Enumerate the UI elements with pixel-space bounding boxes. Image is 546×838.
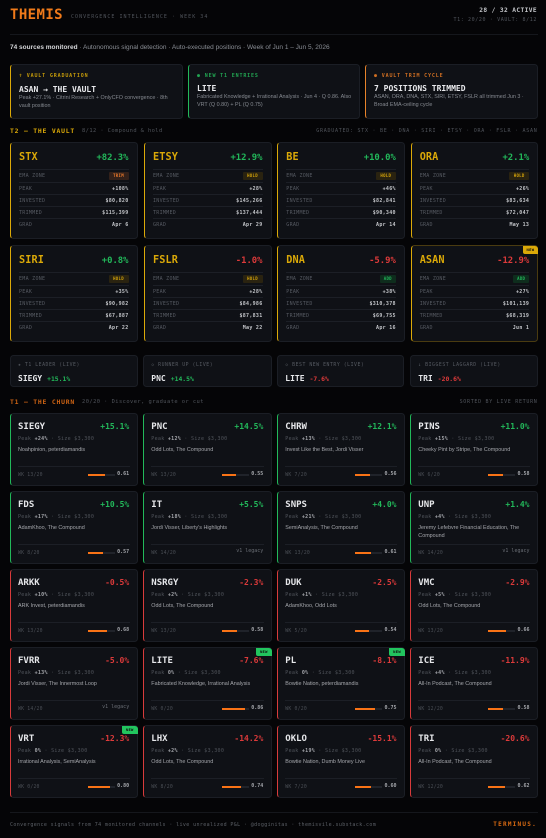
churn card: VRT: Peak 0% · Size $3,300 (18, 748, 88, 754)
churn card: SNPS: 0.61 (384, 549, 396, 555)
section heading: T1 the churn: T1 — THE CHURN (10, 398, 75, 406)
churn card: VMC: Odd Lots, The Compound (418, 603, 480, 609)
churn card: NSRGY (143, 569, 272, 642)
churn card: PNC: PNC (151, 422, 168, 432)
vault card: ASAN: EMA ZONE (420, 276, 446, 282)
churn card: VRT: -12.3% (100, 734, 129, 743)
vault card: STX: Apr 6 (112, 222, 128, 228)
vault card: ETSY: ETSY (153, 152, 178, 163)
churn card: UNP: WK 14/20 (418, 551, 443, 556)
churn card: LHX: Odd Lots, The Compound (151, 759, 213, 765)
vault card: ORA: EMA ZONE (420, 173, 446, 179)
vault card: ASAN (411, 245, 538, 342)
section subheading: churn: 20/20 · Discover, graduate or cut (82, 399, 204, 405)
churn card: ARKK: -0.5% (105, 578, 129, 587)
vault card: DNA: Apr 16 (376, 325, 396, 331)
churn card: TRI: 0.62 (517, 783, 530, 789)
vault card: ASAN: $68,319 (506, 313, 529, 319)
churn card: IT: Peak +18% · Size $3,300 (151, 514, 227, 520)
vault card: ETSY: TRIMMED (153, 210, 176, 216)
churn card: PNC: +14.5% (234, 422, 263, 431)
vault card: ORA: +2.1% (502, 153, 529, 163)
vault card: BE: HOLD (380, 173, 391, 178)
churn card: CHRW: 0.56 (384, 471, 396, 477)
vault card: FSLR: HOLD (247, 276, 258, 281)
churn card: LITE: Fabricated Knowledge, Irrational Analysis (151, 681, 250, 687)
churn card: NSRGY: WK 13/20 (151, 629, 176, 634)
alert: vault graduation: ✝ VAULT GRADUATION (19, 72, 88, 78)
churn card: LHX: LHX (151, 734, 168, 744)
stat: biggest laggard: ↓ BIGGEST LAGGARD (LIVE) (418, 363, 501, 368)
churn card: NSRGY: -2.3% (239, 578, 263, 587)
vault card: FSLR: EMA ZONE (153, 276, 179, 282)
churn card: VRT (10, 725, 138, 798)
vault card: BE: EMA ZONE (286, 173, 313, 179)
vault card: ETSY: PEAK (153, 186, 166, 192)
churn card: LHX: WK 8/20 (151, 785, 173, 790)
churn card: PL (277, 647, 405, 720)
vault card: SIRI: PEAK (19, 289, 32, 295)
vault card: FSLR: +28% (249, 289, 262, 295)
churn card: ARKK: ARK Invest, peterdiamandis (18, 603, 85, 609)
churn card: PINS: +11.0% (501, 422, 530, 431)
churn card: FDS: 0.57 (117, 549, 129, 555)
churn card: ARKK: 0.68 (117, 627, 129, 633)
vault card: ORA: ORA (420, 152, 438, 163)
vault card: ORA: PEAK (420, 186, 433, 192)
churn card: SNPS: SNPS (285, 500, 307, 510)
churn card: LHX: Peak +2% · Size $3,300 (151, 748, 224, 754)
vault card: DNA: PEAK (286, 289, 299, 295)
churn card: SIEGY: WK 13/20 (18, 473, 43, 478)
intro text: 74 sources monitored · Autonomous signal detection · Auto-executed positions · Week of Jun 1 – Jun 5, 2026 (10, 44, 330, 51)
vault card: SIRI: SIRI (19, 255, 44, 266)
churn card: DUK: 0.54 (384, 627, 396, 633)
churn card: VMC: Peak +5% · Size $3,300 (418, 592, 491, 598)
churn card: VRT: 0.80 (117, 783, 129, 789)
stat: runner up: ◇ RUNNER UP (LIVE) (151, 363, 213, 368)
stat: best new entry: LITE -7.6% (285, 374, 329, 383)
churn card: ICE (410, 647, 538, 720)
vault card: ASAN: INVESTED (420, 301, 446, 307)
alert: vault trim cycle (365, 64, 538, 119)
vault card: DNA: INVESTED (286, 301, 313, 307)
header: tier counts: T1: 20/20 · VAULT: 8/12 (454, 16, 537, 22)
vault card: SIRI: INVESTED (19, 301, 45, 307)
vault card: ASAN: NEW (527, 247, 534, 252)
churn card: ICE: WK 12/20 (418, 707, 443, 712)
section subheading: vault: 8/12 · Compound & hold (82, 128, 163, 134)
churn card: TRI: WK 12/20 (418, 785, 443, 790)
vault card: ASAN: GRAD (420, 325, 433, 331)
churn card: LHX (143, 725, 272, 798)
vault card: ETSY: EMA ZONE (153, 173, 179, 179)
vault card: STX: $80,820 (105, 198, 128, 204)
churn card: VRT: WK 0/20 (18, 785, 40, 790)
vault card: SIRI: $67,887 (105, 313, 128, 319)
churn card: IT (143, 491, 272, 564)
churn card: OKLO (277, 725, 405, 798)
vault card: ORA: HOLD (514, 173, 525, 178)
churn card: FVRR: Jordi Visser, The Innermost Loop (18, 681, 97, 687)
churn card: TRI (410, 725, 538, 798)
churn card: PNC (143, 413, 272, 486)
churn card: SNPS: Peak +21% · Size $3,300 (285, 514, 361, 520)
churn card: FVRR: v1 legacy (102, 704, 129, 710)
vault card: ORA: $72,047 (506, 210, 529, 216)
churn card: DUK: -2.5% (372, 578, 396, 587)
churn card: PNC: Peak +12% · Size $3,300 (151, 436, 227, 442)
vault card: STX: +108% (112, 186, 128, 192)
vault card: FSLR: TRIMMED (153, 313, 176, 319)
churn card: PL: 0.75 (384, 705, 396, 711)
churn card: LITE: Peak 0% · Size $3,300 (151, 670, 221, 676)
churn card: ICE: 0.58 (517, 705, 530, 711)
churn card: PINS: 0.58 (517, 471, 530, 477)
churn card: SNPS: +4.0% (372, 500, 396, 509)
vault card: BE: +46% (383, 186, 396, 192)
churn card: DUK: AdamKhoo, Odd Lots (285, 603, 337, 609)
vault card: FSLR: -1.0% (236, 256, 262, 266)
churn card: UNP: Jeremy Lefebvre Financial Education, The Compound (418, 525, 519, 539)
alert: vault trim cycle: ASAN, ORA, DNA, STX, SIRI, ETSY, FSLR all trimmed Jun 3 · Broad EMA-ceiling cycle (374, 94, 524, 108)
churn card: LHX: -14.2% (234, 734, 263, 743)
churn card: OKLO: OKLO (285, 734, 307, 744)
churn card: OKLO: -15.1% (368, 734, 396, 743)
churn card: CHRW: CHRW (285, 422, 307, 432)
vault card: FSLR: INVESTED (153, 301, 179, 307)
churn card: SIEGY: Noahpinion, peterdiamandis (18, 447, 85, 453)
churn card: CHRW: +12.1% (368, 422, 396, 431)
vault card: ASAN: Jun 1 (513, 325, 529, 331)
stat: biggest laggard: TRI -20.6% (418, 374, 461, 383)
churn card: IT: Jordi Visser, Liberty's Highlights (151, 525, 227, 531)
churn card: VMC: WK 13/20 (418, 629, 443, 634)
churn card: LITE: -7.6% (239, 656, 263, 665)
churn card: PINS (410, 413, 538, 486)
churn card: UNP: Peak +4% · Size $3,300 (418, 514, 491, 520)
sort note: SORTED BY LIVE RETURN (460, 399, 538, 405)
stat: runner up: PNC +14.5% (151, 374, 194, 383)
vault card: SIRI: $90,982 (105, 301, 128, 307)
section heading: T2 the vault: T2 — THE VAULT (10, 127, 75, 135)
churn card: FVRR: -5.0% (105, 656, 129, 665)
churn card: LITE (143, 647, 272, 720)
churn card: NSRGY: Odd Lots, The Compound (151, 603, 213, 609)
vault card: FSLR (144, 245, 272, 342)
vault card: ASAN: TRIMMED (420, 313, 443, 319)
vault card: SIRI: HOLD (113, 276, 124, 281)
vault card: ASAN: +27% (516, 289, 529, 295)
churn card: PL: Peak 0% · Size $3,300 (285, 670, 355, 676)
churn card: LHX: 0.74 (251, 783, 263, 789)
churn card: VRT: VRT (18, 734, 34, 744)
vault card: ASAN: PEAK (420, 289, 433, 295)
vault card: STX: STX (19, 152, 38, 163)
churn card: DUK: DUK (285, 578, 302, 588)
alert: vault graduation (10, 64, 183, 119)
vault card: ETSY: +28% (249, 186, 262, 192)
churn card: CHRW (277, 413, 405, 486)
vault card: FSLR: PEAK (153, 289, 166, 295)
graduated list: GRADUATED: STX · BE · DNA · SIRI · ETSY · ORA · FSLR · ASAN (316, 128, 538, 134)
churn card: LITE: LITE (151, 656, 173, 666)
alert: new T1 entries: Fabricated Knowledge + Irrational Analysis · Jun 4 · Q 0.86. Also VRT (Q 0.80) + PL (Q 0.75) (197, 94, 351, 108)
churn card: PL: -8.1% (372, 656, 396, 665)
alert: new T1 entries: LITE (197, 84, 216, 92)
stat: runner up (143, 355, 272, 387)
churn card: VMC: VMC (418, 578, 435, 588)
churn card: SIEGY: +15.1% (100, 422, 129, 431)
stat: T1 leader (10, 355, 138, 387)
churn card: FVRR (10, 647, 138, 720)
churn card: IT: IT (151, 500, 162, 510)
churn card: FDS (10, 491, 138, 564)
vault card: SIRI: EMA ZONE (19, 276, 45, 282)
vault card: BE (277, 142, 405, 238)
churn card: SIEGY: 0.61 (117, 471, 129, 477)
vault card: BE: Apr 14 (376, 222, 396, 228)
vault card: STX: TRIM (113, 173, 124, 178)
churn card: VMC: 0.66 (517, 627, 530, 633)
churn card: PNC: Odd Lots, The Compound (151, 447, 213, 453)
vault card: DNA: DNA (286, 255, 305, 266)
churn card: ICE: All-In Podcast, The Compound (418, 681, 492, 687)
stat: best new entry (277, 355, 404, 387)
churn card: ARKK: Peak +10% · Size $3,300 (18, 592, 94, 598)
churn card: IT: v1 legacy (236, 548, 263, 554)
churn card: UNP (410, 491, 538, 564)
vault card: STX: GRAD (19, 222, 32, 228)
alert: new T1 entries: ● NEW T1 ENTRIES (197, 72, 259, 78)
churn card: PNC: 0.55 (251, 471, 263, 477)
churn card: DUK: Peak +1% · Size $3,300 (285, 592, 358, 598)
vault card: STX: TRIMMED (19, 210, 42, 216)
vault card: SIRI: GRAD (19, 325, 32, 331)
churn card: VRT: Irrational Analysis, SemiAnalysis (18, 759, 96, 765)
vault card: DNA: EMA ZONE (286, 276, 313, 282)
vault card: BE: +10.0% (364, 153, 396, 163)
vault card: FSLR: FSLR (153, 255, 178, 266)
churn card: SIEGY: SIEGY (18, 422, 45, 432)
vault card: FSLR: $84,986 (239, 301, 262, 307)
churn card: TRI: -20.6% (501, 734, 530, 743)
churn card: OKLO: Peak +19% · Size $3,300 (285, 748, 361, 754)
churn card: SNPS: SemiAnalysis, The Compound (285, 525, 358, 531)
vault card: ETSY: +12.9% (230, 153, 262, 163)
vault card: DNA: TRIMMED (286, 313, 309, 319)
vault card: ORA: +26% (516, 186, 529, 192)
churn card: PINS: WK 6/20 (418, 473, 440, 478)
churn card: PINS: Peak +15% · Size $3,300 (418, 436, 494, 442)
churn card: UNP: v1 legacy (502, 548, 530, 554)
vault card: DNA: -5.9% (369, 256, 396, 266)
vault card: BE: TRIMMED (286, 210, 309, 216)
vault card: DNA: +38% (383, 289, 396, 295)
churn card: FDS: Peak +17% · Size $3,300 (18, 514, 94, 520)
stat: T1 leader: ★ T1 LEADER (LIVE) (18, 363, 80, 368)
footer note: Convergence signals from 74 monitored channels · live unrealized P&L · @dogginitas · themisvile.substack.com (10, 822, 376, 828)
vault card: BE: $82,841 (373, 198, 396, 204)
churn card: ARKK (10, 569, 138, 642)
vault card: ORA: TRIMMED (420, 210, 443, 216)
churn card: NSRGY: 0.58 (251, 627, 263, 633)
vault card: DNA: ADD (384, 276, 392, 281)
vault card: DNA: $69,755 (373, 313, 396, 319)
churn card: CHRW: Peak +13% · Size $3,300 (285, 436, 361, 442)
churn card: DUK: WK 5/20 (285, 629, 307, 634)
churn card: PL: PL (285, 656, 296, 666)
churn card: LITE: 0.86 (251, 705, 263, 711)
vault card: ORA: $83,634 (506, 198, 529, 204)
churn card: ICE: -11.9% (501, 656, 530, 665)
vault card: STX: +82.3% (96, 153, 128, 163)
churn card: FVRR: WK 14/20 (18, 707, 43, 712)
vault card: FSLR: May 22 (243, 325, 262, 331)
alert: vault graduation: Peak +27.1% · Citrini Research + OnlyCFO convergence · 8th vault position (19, 94, 168, 109)
churn card: PL: WK 0/20 (285, 707, 307, 712)
alert: vault trim cycle: 7 POSITIONS TRIMMED (374, 84, 466, 92)
vault card: ETSY: GRAD (153, 222, 166, 228)
churn card: PINS: PINS (418, 422, 440, 432)
header: logo: THEMIS (10, 7, 63, 23)
churn card: PL: NEW (393, 649, 401, 654)
vault card: ETSY: $145,266 (236, 198, 262, 204)
vault card: ORA: INVESTED (420, 198, 446, 204)
churn card: FDS: AdamKhoo, The Compound (18, 525, 85, 531)
vault card: STX: EMA ZONE (19, 173, 45, 179)
churn card: FDS: FDS (18, 500, 34, 510)
header: active count: 28 / 32 ACTIVE (479, 7, 537, 14)
churn card: FDS: +10.5% (100, 500, 129, 509)
vault card: ORA: May 13 (509, 222, 529, 228)
stat: T1 leader: SIEGY +15.1% (18, 374, 70, 383)
vault card: STX: $115,399 (102, 210, 128, 216)
churn card: LITE: WK 0/20 (151, 707, 173, 712)
vault card: BE: BE (286, 152, 299, 163)
churn card: IT: +5.5% (239, 500, 263, 509)
alert: new T1 entries (188, 64, 360, 119)
churn card: VRT: NEW (126, 727, 134, 732)
vault card: ASAN: ASAN (420, 255, 445, 266)
stat: biggest laggard (410, 355, 538, 387)
vault card: ASAN: $101,139 (503, 301, 529, 307)
vault card: BE: GRAD (286, 222, 299, 228)
footer brand: TERMINUS. (493, 821, 537, 828)
vault card: DNA: GRAD (286, 325, 299, 331)
vault card: FSLR: $87,831 (239, 313, 262, 319)
churn card: SNPS (277, 491, 405, 564)
churn card: FDS: WK 8/20 (18, 551, 40, 556)
vault card: ASAN: -12.9% (497, 256, 529, 266)
churn card: OKLO: 0.60 (384, 783, 396, 789)
vault card: ETSY: Apr 29 (243, 222, 262, 228)
churn card: VMC: -2.9% (505, 578, 530, 587)
vault card: DNA: $310,378 (369, 301, 396, 307)
vault card: STX: INVESTED (19, 198, 45, 204)
churn card: ARKK: ARKK (18, 578, 40, 588)
churn card: FVRR: FVRR (18, 656, 40, 666)
churn card: IT: WK 14/20 (151, 551, 176, 556)
churn card: FVRR: Peak +13% · Size $3,300 (18, 670, 94, 676)
churn card: ARKK: WK 13/20 (18, 629, 43, 634)
vault card: BE: PEAK (286, 186, 299, 192)
churn card: ICE: ICE (418, 656, 435, 666)
churn card: NSRGY: Peak +2% · Size $3,300 (151, 592, 224, 598)
churn card: CHRW: Invest Like the Best, Jordi Visser (285, 447, 363, 453)
stat: best new entry: ◇ BEST NEW ENTRY (LIVE) (285, 363, 364, 368)
churn card: UNP: +1.4% (505, 500, 530, 509)
vault card: STX (10, 142, 138, 238)
vault card: BE: INVESTED (286, 198, 313, 204)
alert: vault graduation: ASAN → THE VAULT (19, 84, 96, 94)
vault card: ORA: GRAD (420, 222, 433, 228)
vault card: ASAN: ADD (517, 276, 525, 281)
churn card: ICE: Peak +4% · Size $3,300 (418, 670, 491, 676)
vault card: SIRI: TRIMMED (19, 313, 42, 319)
vault card: ETSY: INVESTED (153, 198, 179, 204)
churn card: PNC: WK 13/20 (151, 473, 176, 478)
vault card: ETSY: HOLD (247, 173, 258, 178)
churn card: UNP: UNP (418, 500, 435, 510)
churn card: SIEGY: Peak +24% · Size $3,300 (18, 436, 94, 442)
churn card: OKLO: WK 7/20 (285, 785, 307, 790)
alert: vault trim cycle: ● VAULT TRIM CYCLE (374, 72, 444, 78)
vault card: ETSY: $137,444 (236, 210, 262, 216)
churn card: LITE: NEW (260, 649, 268, 654)
churn card: DUK (277, 569, 405, 642)
vault card: SIRI (10, 245, 138, 342)
churn card: TRI: Peak 0% · Size $3,300 (418, 748, 488, 754)
vault card: ETSY (144, 142, 272, 238)
vault card: ORA (411, 142, 538, 238)
churn card: OKLO: Bowtie Nation, Dumb Money Live (285, 759, 365, 765)
churn card: VMC (410, 569, 538, 642)
churn card: SIEGY (10, 413, 138, 486)
churn card: NSRGY: NSRGY (151, 578, 178, 588)
vault card: STX: PEAK (19, 186, 32, 192)
churn card: TRI: TRI (418, 734, 435, 744)
vault card: SIRI: Apr 22 (109, 325, 128, 331)
vault card: DNA (277, 245, 405, 342)
vault card: SIRI: +0.8% (102, 256, 128, 266)
vault card: FSLR: GRAD (153, 325, 166, 331)
churn card: PINS: Cheeky Pint by Stripe, The Compound (418, 447, 510, 453)
vault card: BE: $90,340 (373, 210, 396, 216)
vault card: SIRI: +35% (115, 289, 128, 295)
churn card: PL: Bowtie Nation, peterdiamandis (285, 681, 358, 687)
churn card: SNPS: WK 13/20 (285, 551, 310, 556)
churn card: TRI: All-In Podcast, The Compound (418, 759, 492, 765)
header: subtitle: CONVERGENCE INTELLIGENCE · WEEK 34 (71, 14, 208, 20)
churn card: CHRW: WK 7/20 (285, 473, 307, 478)
